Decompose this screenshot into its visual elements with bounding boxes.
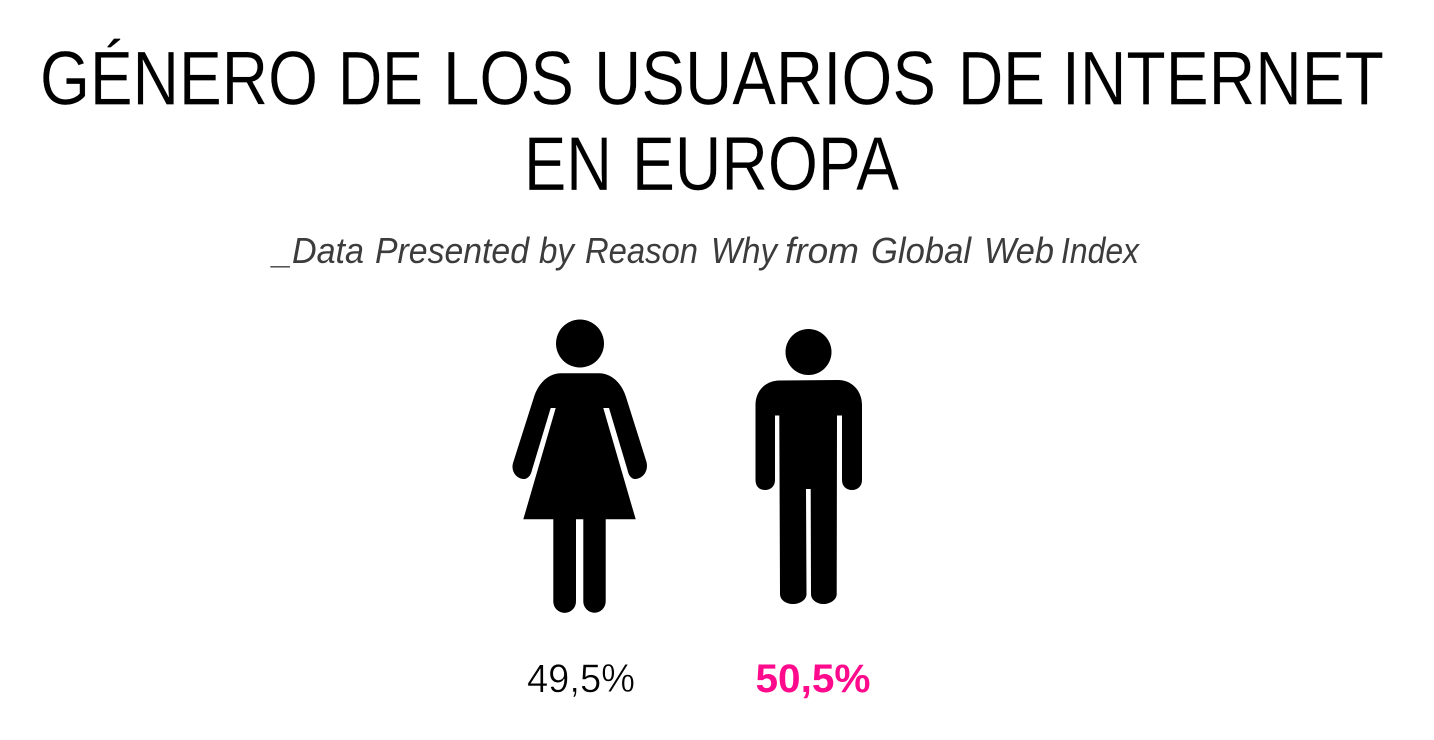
subtitle: Index xyxy=(1061,230,1141,271)
subtitle: Global xyxy=(871,230,972,271)
title: DE xyxy=(958,36,1045,122)
label: women percentage: 49,5% xyxy=(527,657,635,701)
subtitle: _Data xyxy=(270,230,364,271)
subtitle: from xyxy=(785,230,859,271)
title: INTERNET xyxy=(1062,36,1384,122)
title: EUROPA xyxy=(632,122,899,207)
title: DE xyxy=(338,36,423,122)
subtitle: Web xyxy=(984,230,1054,271)
subtitle: by xyxy=(539,230,576,271)
label: men percentage: 50,5% xyxy=(756,657,870,701)
title: GÉNERO xyxy=(40,36,318,122)
subtitle: Presented xyxy=(375,230,530,271)
title: EN xyxy=(524,122,612,207)
subtitle: Reason xyxy=(585,230,698,271)
icon: man xyxy=(756,329,862,604)
subtitle xyxy=(270,230,1141,271)
icon: woman xyxy=(512,320,647,613)
title xyxy=(40,36,1384,207)
title: USUARIOS xyxy=(594,36,936,122)
subtitle: Why xyxy=(711,230,779,271)
title: LOS xyxy=(443,36,574,122)
